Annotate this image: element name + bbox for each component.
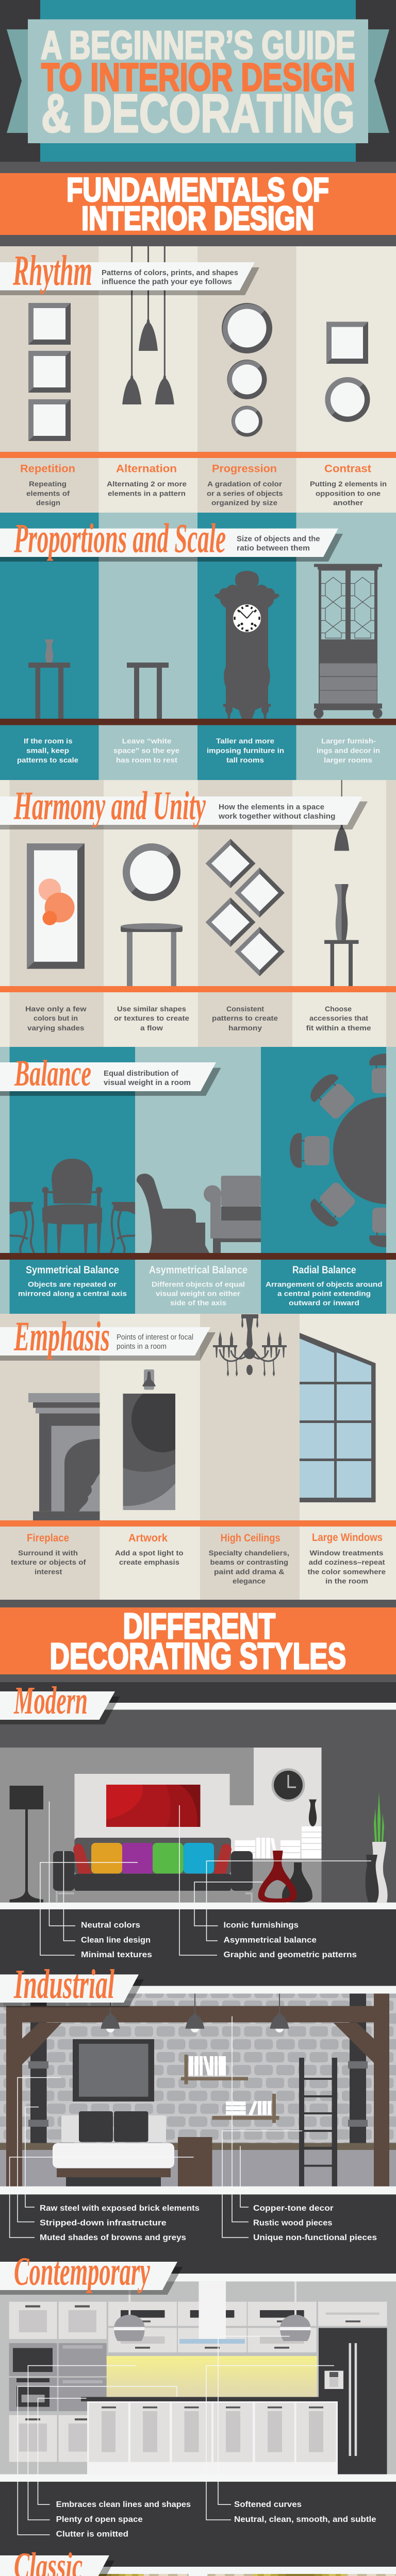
icon: framed picture (73, 2039, 154, 2102)
heading band: different decorating styles: DIFFERENT (123, 1606, 275, 1646)
ribbon: balance heading: visual weight in a room (104, 1079, 191, 1087)
ribbon: contemporary heading (0, 2248, 183, 2295)
text: high ceilings: paint add drama & (214, 1568, 285, 1576)
text: large windows (308, 1532, 386, 1585)
text: consistent patterns: patterns to create (212, 1014, 278, 1022)
text: large windows: in the room (325, 1577, 368, 1585)
panel: proportions and scale (0, 513, 396, 780)
text: larger furnishings: ings and decor in (317, 746, 380, 754)
ribbon: rhythm heading (0, 247, 259, 295)
text: progression: organized by size (211, 499, 277, 507)
text: larger furnishings: Larger furnish- (321, 737, 376, 745)
text: fireplace: texture or objects of (11, 1558, 86, 1566)
text: alternation (107, 463, 187, 498)
panel: modern style (0, 1679, 396, 1986)
text: taller furniture: Taller and more (216, 737, 274, 745)
text: accessories: accessories that (309, 1014, 368, 1022)
callout: neutral and subtle (206, 2366, 376, 2524)
text: asymmetrical balance (149, 1265, 248, 1307)
ribbon: rhythm heading: influence the path your eye follows (102, 278, 232, 286)
ribbon: proportions heading: Proportions and Scale (13, 516, 226, 562)
panel: balance (0, 1047, 396, 1314)
backsplash (107, 2356, 317, 2397)
text: large windows: add coziness–repeat (309, 1558, 385, 1566)
icon: curtain swags (60, 2574, 336, 2576)
text: radial balance: Arrangement of objects around (266, 1280, 383, 1289)
heading band: fundamentals of interior design (0, 162, 396, 246)
icon: floor lamp (10, 1786, 43, 1903)
callout: clean line design (63, 1851, 151, 1944)
text: taller furniture (207, 737, 284, 764)
icon: plant in vases (366, 1792, 388, 1903)
callout: clean lines and shapes: Embraces clean lines and shapes (56, 2500, 191, 2509)
icon: fridge (319, 2328, 387, 2474)
callout: asymmetrical balance: Asymmetrical balance (224, 1936, 317, 1944)
ribbon: balance heading (0, 1053, 221, 1096)
text: taller furniture: tall rooms (226, 756, 264, 764)
ribbon: right tail (368, 29, 389, 133)
text: similar shapes: Use similar shapes (117, 1005, 186, 1013)
callout: stripped-down: Stripped-down infrastructure (40, 2218, 167, 2228)
text: few colors: colors but in (34, 1014, 78, 1022)
text: radial balance (266, 1265, 383, 1307)
text: similar shapes: a flow (140, 1024, 163, 1032)
text: high ceilings (209, 1532, 289, 1585)
icon: pendant globes (114, 2282, 311, 2341)
icon: left cabinets (9, 2302, 107, 2462)
icon: chandelier (213, 1314, 287, 1377)
icon: red wall art (106, 1785, 200, 1827)
ribbon: left tail (7, 29, 28, 133)
text: consistent patterns: harmony (228, 1024, 262, 1032)
text: similar shapes (114, 1005, 189, 1032)
icon: kitchen island (81, 2397, 344, 2474)
heading band: different decorating styles (0, 1600, 396, 1682)
text: contrast: another (333, 499, 364, 507)
icon: wall cabinets (108, 2302, 387, 2352)
callout: clean line design: Clean line design (81, 1936, 151, 1944)
text: artwork: create emphasis (119, 1558, 179, 1566)
text: high ceilings: elegance (233, 1577, 266, 1585)
icon: range hood (199, 2282, 226, 2339)
text: consistent patterns: Consistent (226, 1005, 264, 1013)
icon: large framed art (27, 843, 85, 969)
text: symmetrical balance: Symmetrical Balance (26, 1265, 119, 1276)
ribbon: industrial heading: Industrial (13, 1962, 114, 2007)
panel: emphasis (0, 1313, 396, 1600)
text: taller furniture: imposing furniture in (207, 746, 284, 754)
icon: radial dining table (290, 1054, 396, 1247)
callout: unique pieces (222, 2131, 377, 2242)
text: keep patterns to scale: small, keep (26, 746, 69, 754)
text: white space: has room to rest (116, 756, 177, 764)
title (41, 23, 355, 144)
text: progression: A gradation of color (207, 480, 283, 488)
panel: harmony and unity (0, 780, 396, 1047)
icon: diamond mirrors (205, 839, 285, 976)
callout: muted shades: Muted shades of browns and greys (40, 2233, 186, 2242)
callout: asymmetrical balance (206, 1861, 371, 1944)
text: large windows: Large Windows (312, 1532, 383, 1544)
icon: ladder (299, 2058, 337, 2187)
text: symmetrical balance: Objects are repeated or (28, 1280, 117, 1289)
text: asymmetrical balance: Asymmetrical Balance (149, 1265, 248, 1276)
text: white space (113, 737, 179, 764)
ribbon: harmony heading: work together without clashing (218, 812, 335, 821)
ribbon: balance heading: Balance (14, 1053, 91, 1094)
text: repetition (20, 463, 75, 507)
text: high ceilings: beams or contrasting (210, 1558, 288, 1566)
icon: asymmetrical armchairs (137, 1174, 261, 1253)
callout: iconic furnishings (194, 1882, 299, 1930)
icon: table with vase (324, 884, 359, 986)
text: radial balance: Radial Balance (292, 1265, 356, 1276)
ribbon: harmony heading: Harmony and Unity (13, 783, 206, 828)
text: contrast: Putting 2 elements in (310, 480, 387, 488)
panel: classic style (0, 2546, 396, 2576)
text: large windows: the color somewhere (308, 1568, 386, 1576)
ribbon: proportions heading: Size of objects and the (237, 535, 320, 543)
icon: artwork with spot light (123, 1369, 175, 1510)
text: alternation: Alternating 2 or more (107, 480, 187, 488)
text: accessories: Choose (325, 1005, 352, 1013)
text: contrast: Contrast (324, 463, 371, 475)
text: keep patterns to scale (17, 737, 78, 764)
text: progression: Progression (212, 463, 277, 475)
icon: curtains (48, 2574, 346, 2576)
text: asymmetrical balance: Different objects of equal (152, 1280, 245, 1289)
icon: pipes (30, 1994, 366, 2143)
icon: progression of round mirrors (222, 303, 272, 437)
callout: raw steel (25, 2107, 200, 2213)
icon: hanging lights (101, 1994, 289, 2032)
callout: muted shades (10, 2157, 194, 2242)
title plate (28, 20, 368, 143)
icon: pipe straps (28, 2061, 368, 2127)
text: repetition: Repetition (20, 463, 75, 475)
room scene: classic (0, 2574, 396, 2576)
callout: open space (28, 2366, 143, 2524)
ribbon: balance heading: Equal distribution of (104, 1070, 178, 1078)
text: fireplace (11, 1532, 86, 1576)
text: accessories (306, 1005, 371, 1032)
text: keep patterns to scale: patterns to scale (17, 756, 78, 764)
icon: tall cabinet (314, 564, 383, 718)
heading band: fundamentals of interior design: FUNDAMENTALS OF (67, 171, 329, 208)
text: symmetrical balance: mirrored along a central axis (18, 1290, 127, 1298)
icon: tall grandfather clock (214, 571, 279, 719)
ribbon: rhythm heading: Patterns of colors, prints, and shapes (102, 269, 238, 277)
text: artwork (115, 1532, 184, 1566)
icon: modern sofa (53, 1838, 253, 1902)
callout: clean lines and shapes (38, 2398, 191, 2509)
text: repetition: elements of (26, 489, 70, 498)
text: larger furnishings: larger rooms (324, 756, 372, 764)
callout: clutter omitted (18, 2386, 177, 2539)
text: alternation: elements in a pattern (108, 489, 186, 498)
callout: copper-tone (240, 2146, 334, 2213)
callout: neutral colors (50, 1801, 140, 1930)
icon: pendant lamps (122, 246, 174, 404)
icon: stool (121, 923, 183, 986)
callout: graphic patterns (179, 1805, 357, 1959)
icon: decorative jugs (258, 1851, 312, 1903)
room scene: kitchen (0, 2282, 396, 2475)
text: asymmetrical balance: visual weight on either (156, 1290, 241, 1298)
text: progression: or a series of objects (207, 489, 283, 498)
text: alternation: Alternation (116, 463, 177, 475)
callout: softened curves (218, 2336, 302, 2509)
text: repetition: Repeating (29, 480, 67, 488)
icon: repeated frames (28, 303, 71, 441)
icon: bookshelf books (235, 1800, 322, 1859)
ribbon: emphasis heading: points in a room (117, 1343, 167, 1351)
icon: wall clock (271, 1768, 305, 1802)
ribbon: emphasis heading: Emphasis (13, 1313, 110, 1360)
icon: timber beams (6, 1994, 389, 2187)
icon: fireplace (28, 1393, 100, 1520)
text: radial balance: outward or inward (289, 1299, 359, 1307)
text: similar shapes: or textures to create (114, 1014, 189, 1022)
text: fireplace: Surround it with (18, 1549, 78, 1557)
text: artwork: Add a spot light to (115, 1549, 184, 1557)
panel: contemporary style (0, 2248, 396, 2555)
text: larger furnishings (317, 737, 380, 764)
ribbon: modern heading: Modern (13, 1679, 88, 1722)
text: consistent patterns (212, 1005, 278, 1032)
callout: stripped-down (18, 2077, 167, 2228)
text: fireplace: interest (35, 1568, 62, 1576)
text: contrast: opposition to one (316, 489, 381, 498)
text: contrast (310, 463, 387, 507)
ribbon: proportions heading: ratio between them (237, 544, 310, 552)
text: few colors: Have only a few (25, 1005, 87, 1013)
ribbon: harmony heading: How the elements in a space (219, 803, 324, 811)
icon: large window (300, 1333, 375, 1502)
text: radial balance: a central point extending (277, 1290, 371, 1298)
icon: symmetrical chair and tables (9, 1159, 135, 1253)
icon: pendant lamp (334, 780, 349, 851)
callout: rustic wood: Rustic wood pieces (253, 2218, 333, 2228)
ribbon: contemporary heading: Contemporary (14, 2248, 150, 2293)
text: white space: space” so the eye (113, 746, 179, 754)
icon: small table (127, 663, 169, 719)
text: asymmetrical balance: side of the axis (170, 1299, 226, 1307)
callout: raw steel: Raw steel with exposed brick elements (40, 2204, 200, 2213)
text: high ceilings: Specialty chandeliers, (209, 1549, 289, 1557)
ribbon: emphasis heading: Points of interest or focal (117, 1333, 193, 1342)
room scene: industrial (0, 1994, 396, 2187)
panel: industrial style (0, 1962, 396, 2274)
callout: graphic patterns: Graphic and geometric patterns (224, 1951, 357, 1959)
callout: neutral colors: Neutral colors (81, 1921, 140, 1930)
icon: bed with pillows (53, 2111, 212, 2187)
text: large windows: Window treatments (309, 1549, 384, 1557)
text: few colors: varying shades (27, 1024, 85, 1032)
callout: iconic furnishings: Iconic furnishings (224, 1921, 299, 1930)
text: repetition: design (36, 499, 60, 507)
text: accessories: fit within a theme (306, 1024, 371, 1032)
text: artwork: Artwork (128, 1532, 168, 1544)
text: white space: Leave “white (122, 737, 172, 745)
heading band: fundamentals of interior design: INTERIOR DESIGN (81, 199, 314, 237)
room scene: modern (0, 1748, 322, 1903)
text: few colors (25, 1005, 87, 1032)
callout: neutral and subtle: Neutral, clean, smooth, and subtle (234, 2515, 376, 2524)
panel: title header (0, 0, 396, 162)
text: progression (207, 463, 283, 507)
callout: copper-tone: Copper-tone decor (253, 2204, 334, 2213)
callout: minimal textures: Minimal textures (81, 1951, 152, 1959)
callout: softened curves: Softened curves (234, 2500, 302, 2509)
icon: round mirror (123, 843, 180, 901)
text: symmetrical balance (18, 1265, 127, 1298)
panel: rhythm (0, 246, 396, 513)
callout: minimal textures (40, 1862, 152, 1959)
icon: contrast frame and mirror (325, 322, 370, 422)
text: high ceilings: High Ceilings (221, 1532, 280, 1544)
callout: unique pieces: Unique non-functional pieces (253, 2233, 377, 2242)
callout: clutter omitted: Clutter is omitted (56, 2530, 128, 2539)
text: keep patterns to scale: If the room is (24, 737, 73, 745)
callout: open space: Plenty of open space (56, 2515, 143, 2524)
icon: small table with vase (28, 639, 70, 719)
icon: white chandelier (157, 2574, 239, 2576)
callout: rustic wood (232, 2016, 333, 2228)
text: fireplace: Fireplace (27, 1532, 69, 1544)
icon: wall shelves with books (181, 2055, 279, 2123)
ribbon: rhythm heading: Rhythm (12, 247, 92, 295)
